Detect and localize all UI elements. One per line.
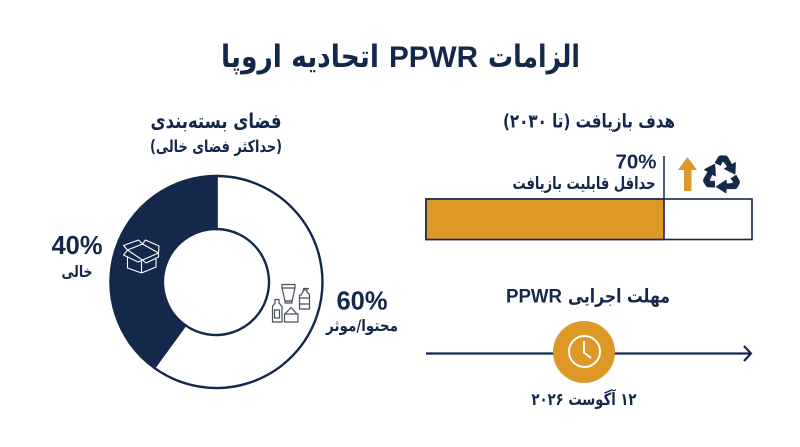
icon: clock on gold circle [553, 321, 615, 383]
label: 40% empty: خالی [62, 262, 92, 281]
icon: open box [124, 240, 159, 273]
icon: recycling symbol [699, 156, 742, 196]
donut chart [110, 176, 322, 388]
label: 60% content: محتوا/موثر [325, 316, 398, 335]
heading: recycling target: هدف بازیافت (تا ۲۰۳۰) [503, 110, 675, 132]
label: date: ۱۲ آگوست ۲۰۲۶ [532, 388, 637, 410]
label: 40% empty: 40% [51, 232, 103, 260]
panel: recycling target [426, 110, 752, 240]
heading: PPWR deadline: PPWR [506, 286, 562, 308]
subheading: maximum empty space: (حداکثر فضای خالی) [150, 137, 282, 157]
label: minimum recyclability: حداقل قابلیت بازیافت [512, 174, 656, 194]
heading: PPWR deadline [506, 286, 670, 308]
panel: enforcement deadline [426, 286, 751, 410]
label: 70%: 70% [615, 150, 657, 174]
label: 60% content [325, 288, 398, 335]
heading: PPWR deadline: مهلت اجرایی [568, 286, 670, 308]
label: 40% empty [51, 232, 103, 281]
timeline arrow [426, 346, 751, 361]
panel: packaging space [51, 109, 398, 388]
icon: cosmetic bottles [272, 284, 310, 322]
title: PPWR [389, 41, 478, 74]
title: الزامات [488, 39, 580, 75]
heading: packaging space: فضای بسته‌بندی [150, 109, 282, 133]
marker line at 70% [663, 156, 665, 199]
progress bar: 70 percent [426, 199, 752, 240]
title: اتحادیه اروپا [221, 39, 379, 75]
icon: up arrow [678, 157, 697, 191]
label: 60% content: 60% [336, 288, 388, 316]
title [221, 39, 580, 75]
